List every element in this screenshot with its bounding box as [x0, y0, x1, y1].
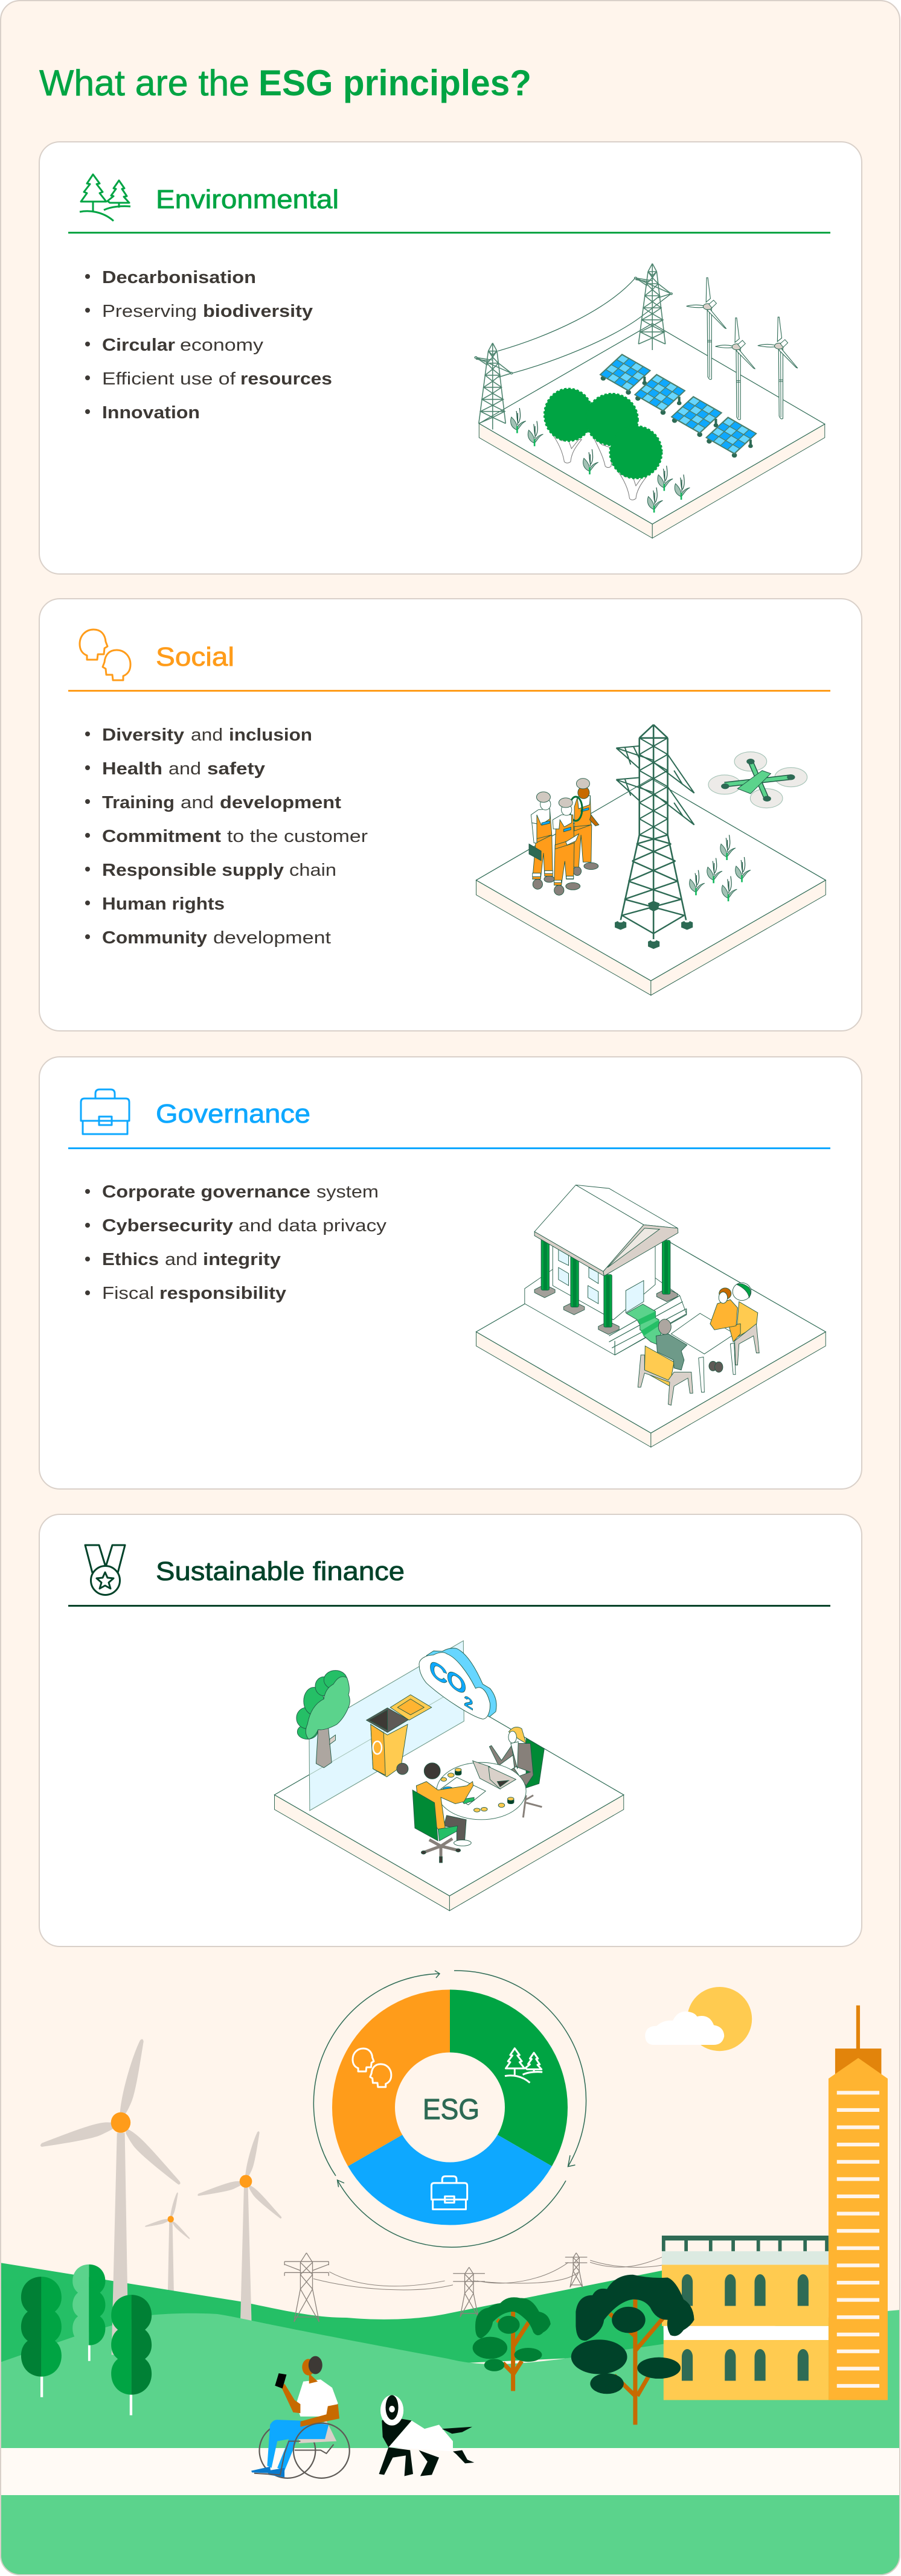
panel: environmental — [39, 142, 862, 574]
sun — [687, 1987, 752, 2051]
cloud with CO2: O — [447, 1663, 466, 1701]
list: social: to the customer — [227, 827, 368, 846]
list: governance: system — [316, 1182, 379, 1202]
meeting people — [638, 1283, 759, 1405]
list: governance: Ethics — [102, 1250, 159, 1269]
icon: trees — [505, 2048, 542, 2083]
segment: environmental — [450, 1989, 568, 2166]
list: social — [85, 725, 368, 948]
icon: heads — [80, 630, 130, 680]
list: governance: responsibility — [159, 1284, 286, 1303]
heading: environmental: Environmental — [156, 185, 339, 214]
list: social: safety — [207, 759, 265, 779]
cycle arrows — [313, 1971, 586, 2247]
list: social: Diversity — [102, 725, 184, 745]
icon: briefcase — [431, 2176, 467, 2209]
illustration: energy landscape — [475, 264, 825, 538]
list: social: and — [168, 759, 201, 779]
list: social: and — [191, 725, 223, 745]
heading: governance: Governance — [156, 1099, 310, 1129]
icon: trees — [80, 174, 130, 221]
list: social: Training — [102, 793, 175, 812]
man and chair — [412, 1763, 473, 1863]
illustration: sustainable finance meeting — [275, 1640, 624, 1911]
recycling bin — [367, 1695, 432, 1777]
workers — [529, 779, 599, 895]
illustration: institution building and meeting — [476, 1185, 826, 1447]
list: social: development — [220, 793, 341, 812]
buildings — [662, 2006, 888, 2400]
list: social: Health — [102, 759, 162, 779]
trees: right group — [473, 2275, 694, 2425]
list: social: Community — [102, 928, 207, 948]
list: social: inclusion — [229, 725, 312, 745]
cloud with CO2 — [419, 1648, 496, 1719]
cloud with CO2: 2 — [464, 1692, 473, 1714]
dark green hill — [1, 2263, 664, 2363]
icon: heads — [353, 2048, 391, 2087]
guide dog — [379, 2395, 474, 2476]
tree — [297, 1671, 350, 1768]
drone — [708, 752, 807, 808]
list: social: Human rights — [102, 894, 225, 914]
list: environmental: economy — [180, 336, 264, 355]
list: governance: Corporate governance — [102, 1182, 310, 1202]
list: environmental: Decarbonisation — [102, 268, 256, 287]
woman and chair — [489, 1727, 544, 1817]
list: governance: Cybersecurity — [102, 1216, 233, 1235]
list: social: chain — [289, 861, 336, 880]
title: What are the — [39, 63, 249, 103]
illustration: workers, pylon and drone — [476, 725, 826, 995]
list: social: and — [181, 793, 214, 812]
list: governance: and data privacy — [239, 1216, 387, 1235]
ESG cycle diagram — [313, 1971, 586, 2247]
list: environmental: Preserving — [102, 302, 197, 321]
small distant turbine — [145, 2193, 190, 2294]
list: governance: Fiscal — [102, 1284, 154, 1303]
panel: social — [39, 599, 862, 1031]
segment: social — [332, 1989, 450, 2166]
icon: medal — [85, 1545, 125, 1595]
list: social: Commitment — [102, 827, 221, 846]
light green hill — [0, 2310, 901, 2576]
panel: sustainable finance — [39, 1514, 862, 1946]
list: environmental: Circular — [102, 336, 175, 355]
heading: social: Social — [156, 642, 234, 672]
list: governance: and — [165, 1250, 197, 1269]
list: environmental: Innovation — [102, 403, 200, 422]
pylons and wires — [284, 2253, 662, 2322]
list: social: development — [213, 928, 331, 948]
person in wheelchair — [251, 2356, 350, 2478]
label: ESG: ESG — [423, 2094, 479, 2126]
cloud — [645, 2012, 724, 2045]
table — [437, 1761, 526, 1820]
title: ESG principles? — [258, 63, 531, 103]
list: governance: integrity — [203, 1250, 281, 1269]
medium turbine — [197, 2131, 281, 2323]
list: environmental: resources — [240, 369, 332, 389]
list: environmental: biodiversity — [203, 302, 313, 321]
list: environmental: Efficient use of — [102, 369, 236, 389]
trees: left group — [21, 2265, 152, 2415]
icon: briefcase — [81, 1089, 129, 1134]
list: governance — [85, 1182, 387, 1303]
segment: governance — [348, 2135, 552, 2225]
list: social: Responsible supply — [102, 861, 284, 880]
list: environmental — [85, 268, 332, 422]
title — [39, 63, 531, 103]
tall turbine — [40, 2039, 181, 2355]
panel: governance — [39, 1057, 862, 1489]
heading: sustainable finance: Sustainable finance — [156, 1557, 405, 1586]
road — [0, 2448, 901, 2495]
cloud with CO2: C — [429, 1654, 447, 1691]
